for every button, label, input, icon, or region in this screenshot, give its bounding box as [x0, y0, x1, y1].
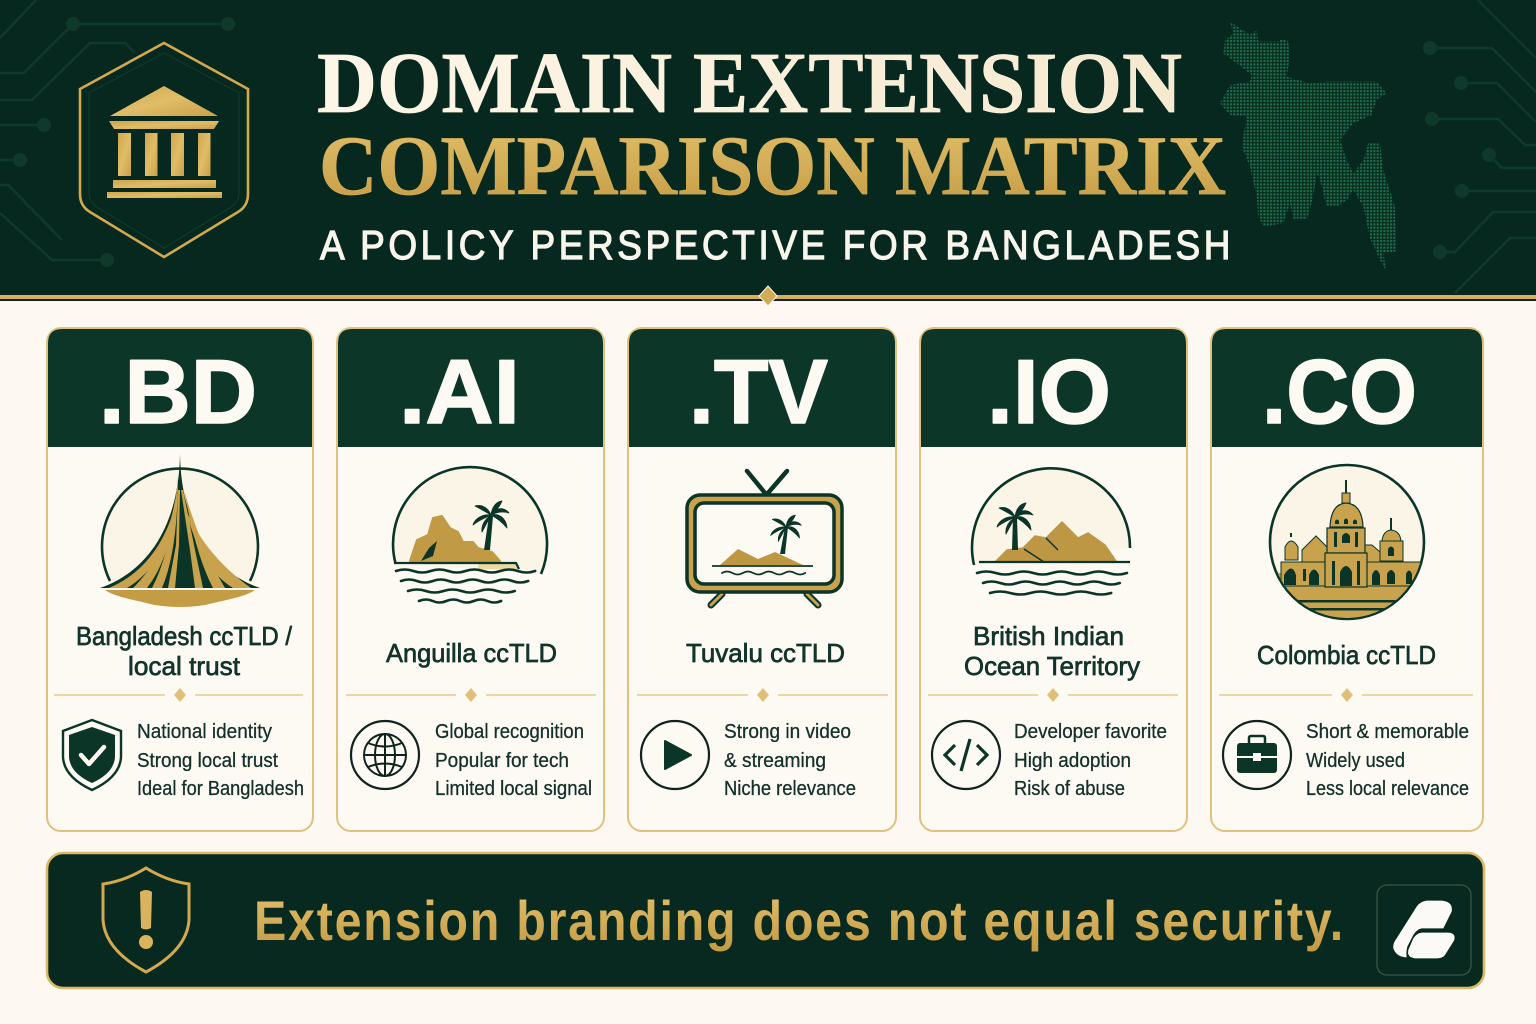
bullet list .TV: & streaming	[724, 749, 826, 772]
circuit traces left	[0, 0, 235, 267]
panel: .IO	[920, 328, 1187, 831]
bullet list .CO	[1306, 720, 1469, 800]
header band .TV	[629, 329, 895, 447]
label .CO: Colombia ccTLD	[1257, 640, 1436, 670]
gold header rule with diamond	[0, 286, 1536, 306]
label .BD: local trust	[128, 651, 241, 681]
emblem: hexagon with institution building	[80, 43, 248, 257]
label .IO: Ocean Territory	[964, 651, 1140, 681]
bullet list .TV: Strong in video	[724, 720, 851, 743]
label .IO	[964, 621, 1140, 681]
bullet list .BD	[137, 720, 304, 800]
header band .AI	[338, 329, 603, 447]
bullet list .AI: Global recognition	[435, 720, 584, 743]
icon: shield check	[63, 720, 121, 790]
bullet list .AI: Popular for tech	[435, 749, 569, 772]
header band .IO	[921, 329, 1186, 447]
icon: code brackets	[932, 721, 1000, 789]
bullet list .IO: Risk of abuse	[1014, 777, 1125, 800]
icon: retro television	[687, 471, 842, 605]
panel: .TV	[628, 328, 896, 831]
bullet list .BD: Strong local trust	[137, 749, 278, 772]
title line 1: DOMAIN EXTENSION	[317, 34, 1182, 131]
header band .BD	[48, 329, 312, 447]
label .BD: Bangladesh ccTLD /	[76, 621, 293, 651]
bullet list .TV	[724, 720, 856, 800]
title line 2: COMPARISON MATRIX	[319, 119, 1226, 213]
bullet list .IO	[1014, 720, 1167, 800]
panel: .CO	[1211, 328, 1483, 831]
bullet list .IO: Developer favorite	[1014, 720, 1167, 743]
icon: Colombian cathedral	[1270, 465, 1424, 623]
label .TV: Tuvalu ccTLD	[686, 638, 845, 668]
icon: national parliament building	[100, 454, 260, 607]
dotted map of Bangladesh	[1220, 22, 1396, 272]
bullet list .IO: High adoption	[1014, 749, 1131, 772]
panel: .BD	[47, 328, 313, 831]
icon: British Indian Ocean island	[972, 468, 1130, 594]
header banner	[0, 0, 1536, 295]
panel: .AI	[337, 328, 604, 831]
callout banner	[47, 853, 1484, 988]
extension name .CO: .CO	[1262, 342, 1417, 443]
icon: play button	[641, 721, 709, 789]
label .IO: British Indian	[973, 621, 1124, 651]
bullet list .BD: National identity	[137, 720, 273, 743]
icon: briefcase	[1223, 721, 1291, 789]
bullet list .TV: Niche relevance	[724, 777, 856, 800]
icon: warning shield	[103, 868, 189, 972]
bullet list .CO: Short & memorable	[1306, 720, 1469, 743]
label .BD	[76, 621, 293, 681]
bullet list .CO: Less local relevance	[1306, 777, 1469, 800]
bullet list .AI	[435, 720, 592, 800]
extension name .IO: .IO	[987, 342, 1111, 443]
circuit traces right	[1423, 0, 1536, 293]
label .AI: Anguilla ccTLD	[386, 638, 557, 668]
callout statement: Extension branding does not equal security.	[254, 889, 1345, 952]
bullet list .CO: Widely used	[1306, 749, 1405, 772]
icon: globe	[351, 721, 419, 789]
bullet list .BD: Ideal for Bangladesh	[137, 777, 304, 800]
icon: Anguilla island	[393, 467, 547, 602]
extension name .TV: .TV	[689, 342, 828, 443]
header band .CO	[1212, 329, 1482, 447]
subtitle: A POLICY PERSPECTIVE FOR BANGLADESH	[320, 222, 1234, 268]
extension name .AI: .AI	[399, 342, 520, 443]
bullet list .AI: Limited local signal	[435, 777, 592, 800]
extension name .BD: .BD	[99, 342, 257, 443]
logo badge	[1377, 885, 1471, 975]
